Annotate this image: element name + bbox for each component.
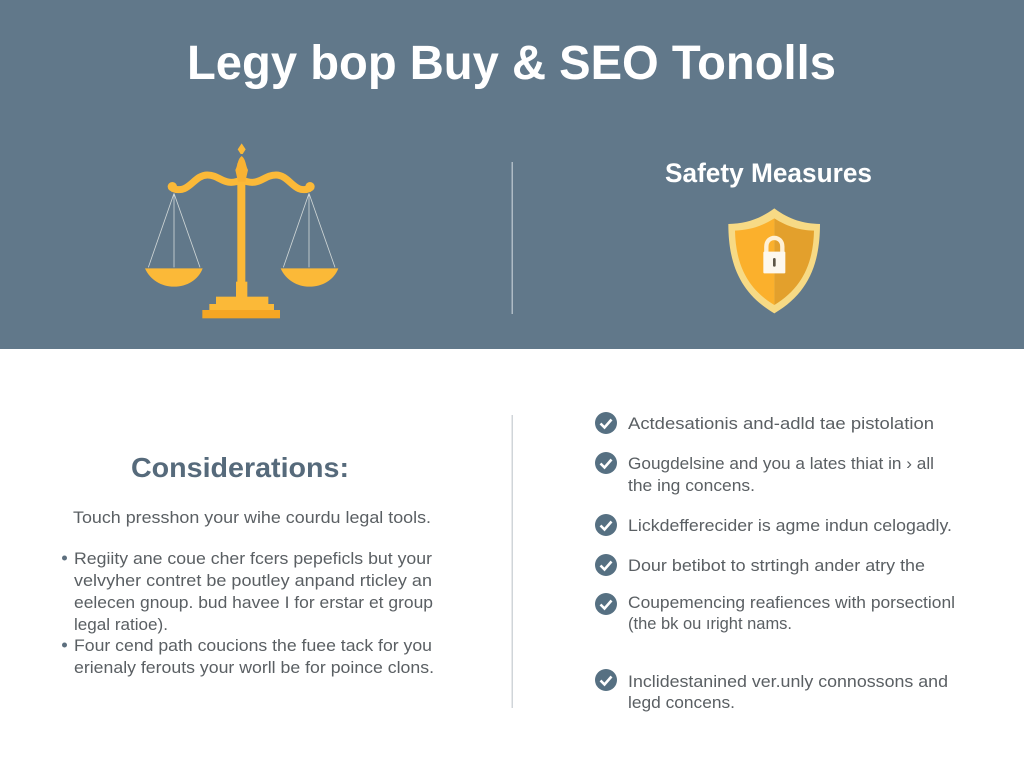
heading: safety measures: Safety Measures xyxy=(665,158,872,188)
check item 1 xyxy=(595,412,934,434)
check item 3: Lickdefferecider is agme indun celogadly. xyxy=(628,517,952,535)
check item 2: the ing concens. xyxy=(628,477,755,495)
check item 2 xyxy=(595,452,934,495)
check item 2: Gougdelsine and you a lates thiat in › all xyxy=(628,455,934,473)
divider: header xyxy=(512,162,513,314)
check item 3 xyxy=(595,514,952,536)
check item 1: Actdesationis and-adld tae pistolation xyxy=(628,415,934,433)
check item 4: Dour betibot to strtingh ander atry the xyxy=(628,557,925,575)
bullet list: second item xyxy=(62,637,434,677)
heading: considerations: Considerations: xyxy=(131,452,349,483)
check item 5: (the bk ou ıright nams. xyxy=(628,615,792,633)
check item 6 xyxy=(595,669,948,712)
icon: scales of justice xyxy=(145,143,338,318)
bullet list: first item: eelecen gnoup. bud havee I for erstar et group xyxy=(74,594,433,612)
bullet list: second item: Four cend path coucions the fuee tack for you xyxy=(74,637,432,655)
text block: intro: Touch presshon your wihe courdu legal tools. xyxy=(73,509,431,527)
panel: safety checklist xyxy=(595,412,955,712)
title: Legy bop Buy & SEO Tonolls xyxy=(187,37,836,90)
bullet list: second item: erienaly ferouts your worll be for poince clons. xyxy=(74,659,434,677)
check item 4 xyxy=(595,554,925,576)
check item 5 xyxy=(595,593,955,633)
bullet list: first item xyxy=(62,550,433,634)
panel: header band xyxy=(0,0,1024,349)
check item 6: legd concens. xyxy=(628,694,735,712)
check item 6: Inclidestanined ver.unly connossons and xyxy=(628,673,948,691)
bullet list: first item: legal ratioe). xyxy=(74,616,168,634)
check item 5: Coupemencing reafiences with porsectionl xyxy=(628,594,955,612)
bullet list: first item: Regiity ane coue cher fcers pepeficls but your xyxy=(74,550,433,568)
icon: shield with padlock xyxy=(728,208,820,313)
bullet list: first item: velvyher contret be poutley anpand rticley an xyxy=(74,572,432,590)
divider: lower xyxy=(512,415,513,708)
panel: considerations xyxy=(62,452,434,677)
